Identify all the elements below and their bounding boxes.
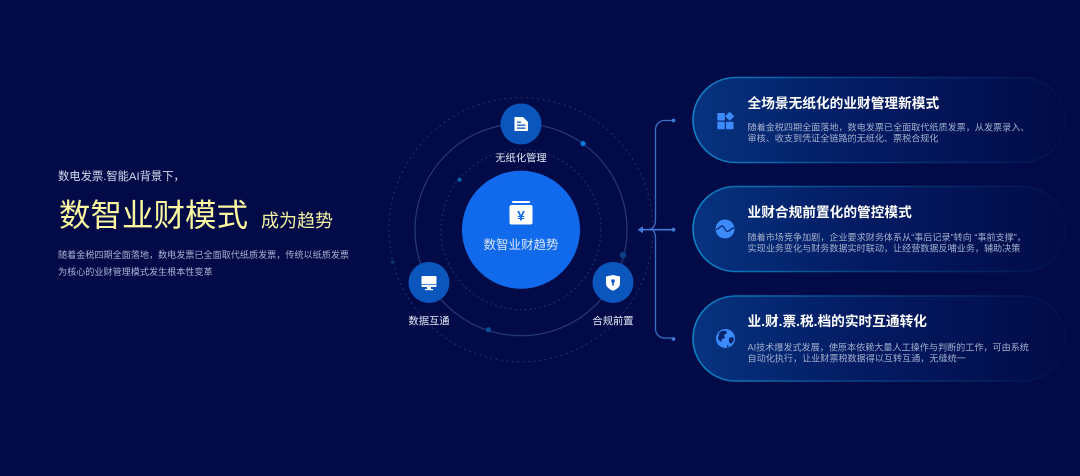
node label: 数据互通 xyxy=(408,314,450,328)
eyebrow line: 数电发票.智能AI背景下， xyxy=(58,171,185,183)
main heading: 数智业财模式 xyxy=(59,197,248,233)
node: paperless xyxy=(495,104,547,164)
panel description: 审核、收支到凭证全链路的无纸化、票税合规化 xyxy=(748,132,938,144)
icon: document xyxy=(514,117,528,131)
panel heading: 业.财.票.税.档的实时互通转化 xyxy=(748,313,927,329)
icon: shield with keyhole xyxy=(606,275,620,291)
panel heading: 业财合规前置化的管控模式 xyxy=(748,204,912,220)
orbit rings xyxy=(389,98,653,362)
node label: 合规前置 xyxy=(592,314,634,328)
panel description: 随着市场竞争加剧，企业要求财务体系从“事后记录”转向 “事前支撑”， xyxy=(748,232,1026,242)
intro description: 为核心的业财管理模式发生根本性变革 xyxy=(58,266,213,276)
panel: compliance first xyxy=(693,186,1065,272)
center label: 数智业财趋势 xyxy=(483,237,559,252)
panel: paperless management xyxy=(693,78,1065,162)
icon: app blocks xyxy=(717,112,734,129)
orbit dots xyxy=(391,141,626,332)
panel description: 自动化执行，让业财票税数据得以互转互通，无缝统一 xyxy=(748,352,966,364)
center circle xyxy=(462,171,580,289)
intro description xyxy=(58,250,349,276)
panel description: 随着金税四期全面落地，数电发票已全面取代纸质发票，从发票录入、 xyxy=(748,122,1029,132)
heading suffix: 成为趋势 xyxy=(261,210,333,230)
node: data interconnect xyxy=(408,262,450,328)
node: compliance xyxy=(592,262,634,328)
panel description: 实现业务变化与财务数据实时联动，让经营数据反哺业务，辅助决策 xyxy=(748,242,1020,254)
icon: wallet with yen: ¥ xyxy=(517,208,525,224)
bracket connector xyxy=(638,119,675,341)
icon: globe xyxy=(716,329,735,348)
panel: real-time interconnection xyxy=(693,296,1065,381)
panel description: AI技术爆发式发展，使原本依赖大量人工操作与判断的工作，可由系统 xyxy=(748,342,1029,352)
icon: monitor xyxy=(422,276,436,290)
intro description: 随着金税四期全面落地，数电发票已全面取代纸质发票，传统以纸质发票 xyxy=(58,250,349,260)
intro text block xyxy=(58,170,349,276)
icon: wave circle xyxy=(716,220,734,238)
panel heading: 全场景无纸化的业财管理新模式 xyxy=(748,95,939,111)
node label: 无纸化管理 xyxy=(495,152,547,164)
